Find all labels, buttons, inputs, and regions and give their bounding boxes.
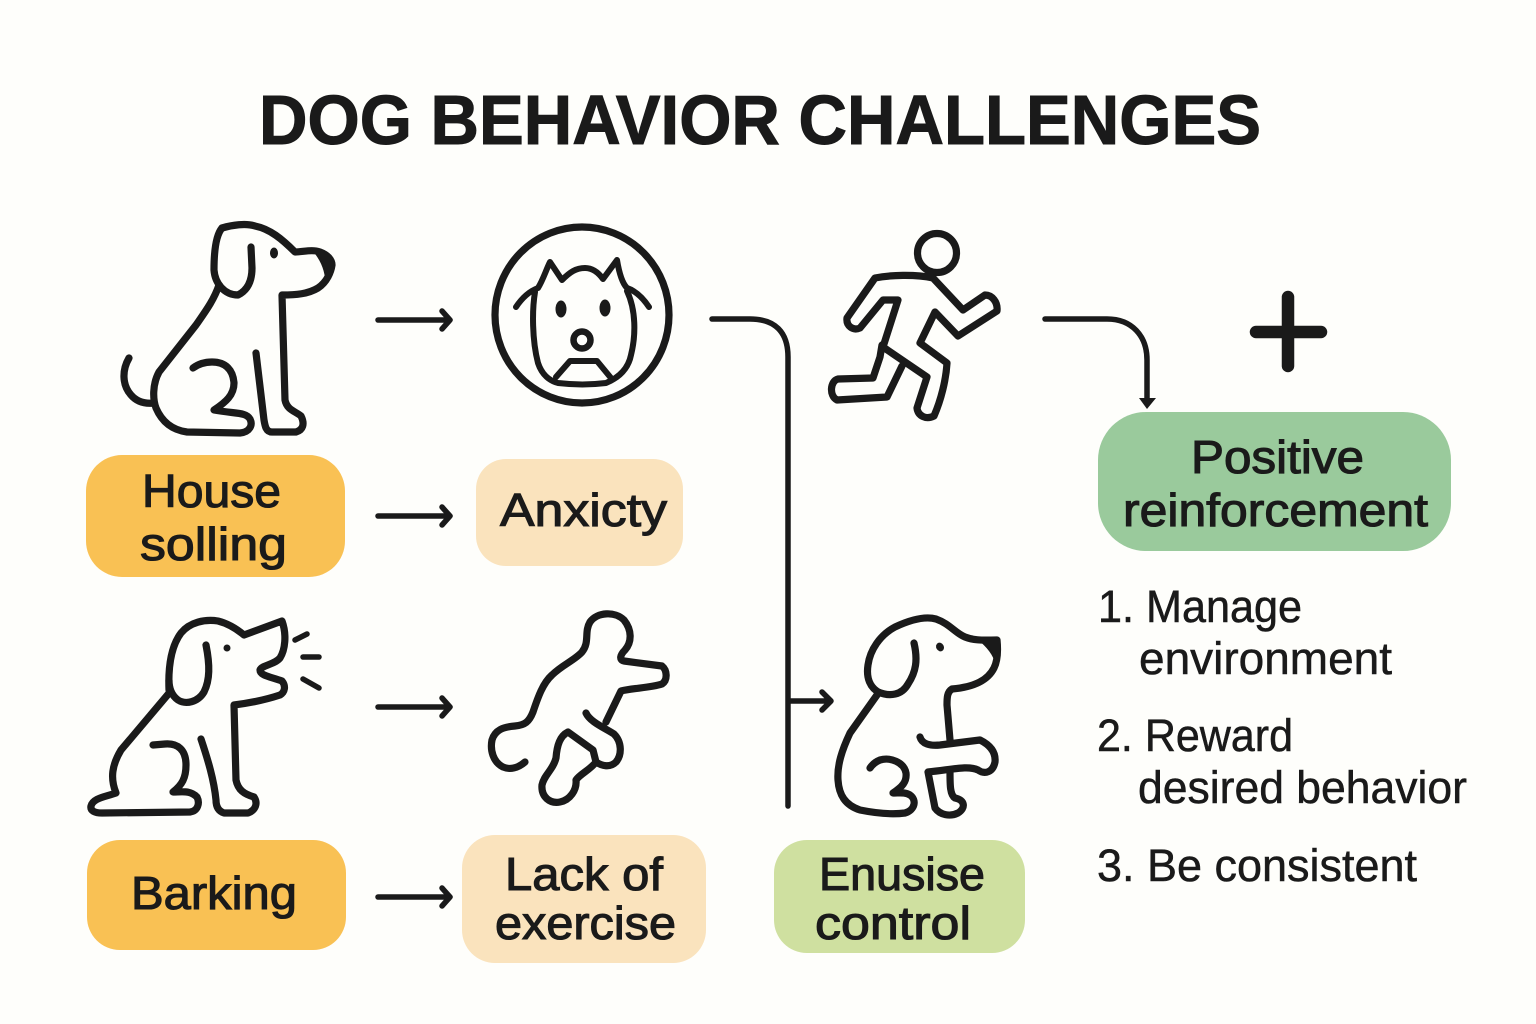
label: anxiety [476, 459, 683, 566]
label: lack of exercise: exercise [495, 897, 676, 949]
icon: anxious dog face in circle [495, 227, 669, 403]
label: impulse control [774, 840, 1025, 953]
arrow: barking to lack of exercise [378, 888, 450, 906]
icon: sitting dog [124, 225, 334, 433]
label: positive reinforcement: reinforcement [1123, 484, 1428, 536]
label: impulse control: Enusise [819, 848, 985, 900]
icon: dog sitting up [838, 618, 999, 815]
label: impulse control: control [815, 897, 971, 949]
numbered list: steps: 1. Manage [1098, 581, 1302, 632]
numbered list: steps: 3. Be consistent [1097, 840, 1417, 891]
arrow: runner to positive reinforcement [1045, 319, 1156, 409]
arrow: dog to anxious face [378, 311, 450, 329]
icon: running person [831, 234, 997, 418]
connector: face to sitting-up dog [712, 319, 831, 806]
icon: barking dog [91, 620, 319, 813]
label: barking: Barking [131, 867, 297, 919]
label: positive reinforcement: Positive [1191, 431, 1364, 483]
label: positive reinforcement [1098, 412, 1451, 551]
label: house soiling: solling [140, 518, 287, 570]
arrow: house soiling to anxiety [378, 507, 450, 525]
numbered list: steps: desired behavior [1138, 762, 1467, 813]
label: lack of exercise [462, 835, 706, 963]
numbered list: steps: 2. Reward [1097, 710, 1293, 761]
label: house soiling: House [142, 465, 281, 517]
numbered list: steps [1097, 581, 1467, 891]
icon: stretching figure [491, 614, 666, 802]
icon: plus [1256, 297, 1321, 366]
title: DOG BEHAVIOR CHALLENGES [259, 81, 1261, 159]
label: house soiling [86, 455, 345, 577]
arrow: barking dog to figure [378, 698, 450, 716]
label: anxiety: Anxicty [500, 484, 667, 536]
label: barking [87, 840, 346, 950]
numbered list: steps: environment [1139, 633, 1392, 684]
label: lack of exercise: Lack of [505, 848, 663, 900]
